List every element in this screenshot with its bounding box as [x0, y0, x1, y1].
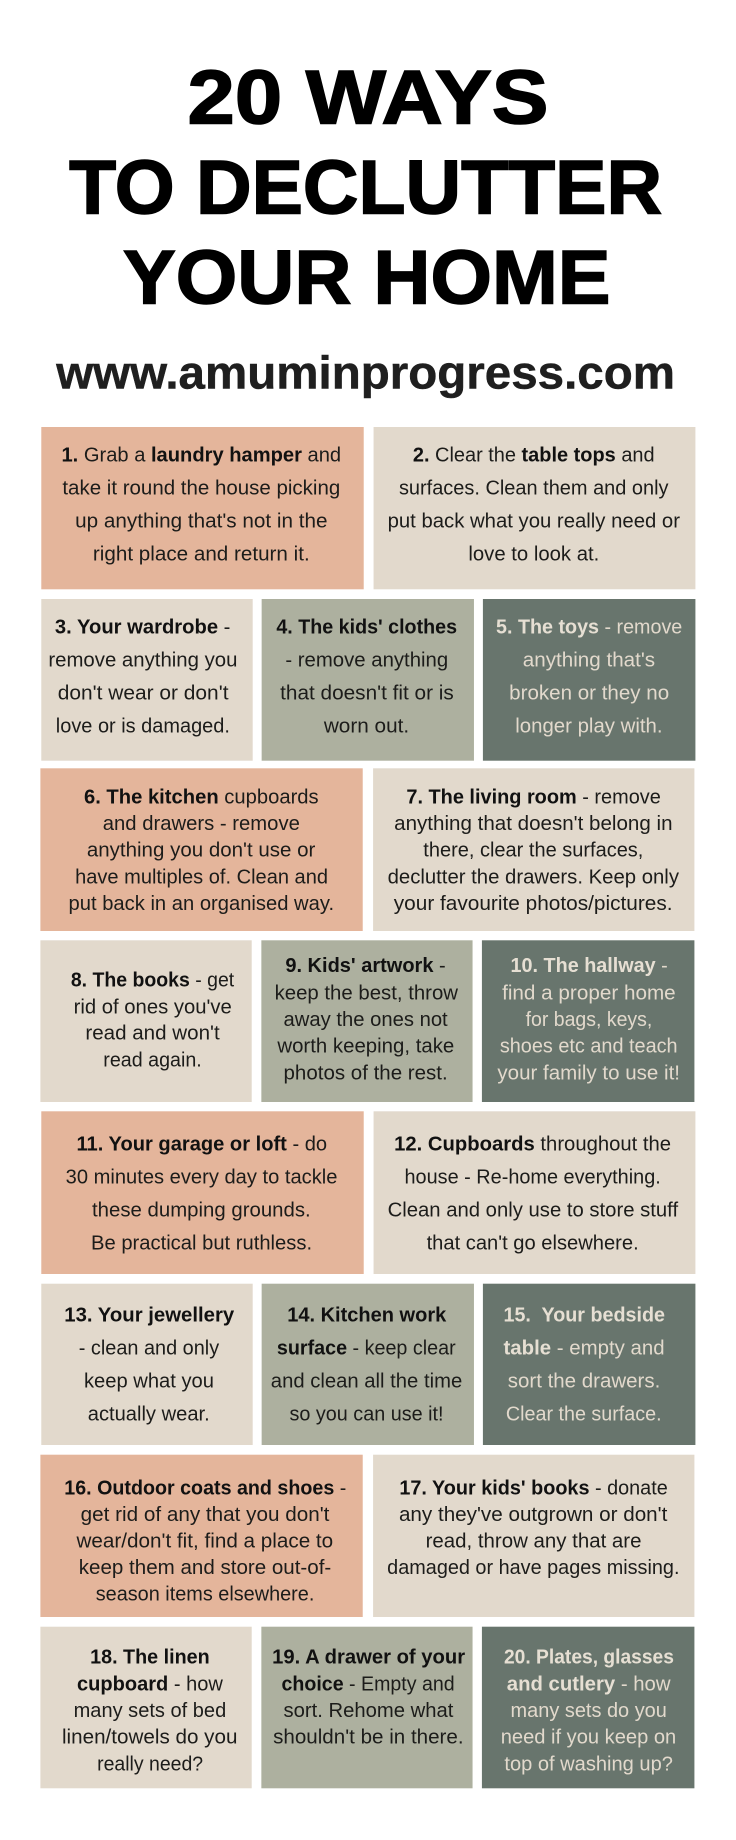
panel: tip 5: anything that's	[523, 649, 655, 672]
panel: tip 20: many sets do you	[511, 1699, 667, 1722]
panel: tip 14: surface - keep clear	[277, 1337, 456, 1360]
panel: tip 1: up anything that's not in the	[75, 510, 328, 533]
panel: tip 16: season items elsewhere.	[96, 1583, 314, 1606]
website url: www.amuminprogress.com	[55, 346, 675, 398]
title: YOUR HOME	[123, 236, 611, 321]
panel: tip 17: damaged or have pages missing.	[387, 1556, 679, 1579]
title: TO DECLUTTER	[69, 145, 662, 230]
panel: tip 5: longer play with.	[515, 715, 663, 738]
panel: tip 17: any they've outgrown or don't	[399, 1503, 668, 1526]
panel: tip 10: shoes etc and teach	[500, 1035, 678, 1058]
panel: tip 8: 8. The books - get	[71, 969, 234, 992]
panel: tip 7	[373, 768, 694, 931]
panel: tip 12: 12. Cupboards throughout the	[394, 1132, 671, 1155]
panel: tip 6: anything you don't use or	[87, 839, 316, 862]
panel: tip 8: rid of ones you've	[74, 995, 232, 1018]
panel: tip 12	[374, 1111, 695, 1274]
panel: tip 9: away the ones not	[284, 1008, 448, 1031]
panel: tip 13: 13. Your jewellery	[64, 1303, 235, 1326]
panel: tip 15: Clear the surface.	[506, 1403, 662, 1426]
panel: tip 15: 15. Your bedside	[504, 1303, 665, 1326]
panel: tip 8: read again.	[103, 1048, 202, 1071]
panel: tip 19: shouldn't be in there.	[273, 1726, 464, 1749]
panel: tip 14: and clean all the time	[271, 1370, 462, 1393]
panel: tip 18: cupboard - how	[77, 1672, 223, 1695]
panel: tip 20: 20. Plates, glasses	[504, 1646, 674, 1669]
panel: tip 12: Clean and only use to store stuff	[388, 1199, 678, 1222]
panel: tip 4	[262, 599, 474, 761]
panel: tip 11: these dumping grounds.	[92, 1199, 311, 1222]
panel: tip 16	[40, 1455, 363, 1617]
panel: tip 3: don't wear or don't	[58, 682, 229, 705]
panel: tip 16: keep them and store out-of-	[79, 1556, 331, 1579]
panel: tip 15: sort the drawers.	[508, 1370, 660, 1393]
panel: tip 18: really need?	[97, 1752, 203, 1775]
panel: tip 17	[373, 1455, 694, 1617]
panel: tip 4: that doesn't fit or is	[280, 682, 454, 705]
title	[69, 55, 662, 321]
panel: tip 5: broken or they no	[509, 682, 669, 705]
panel: tip 7: your favourite photos/pictures.	[394, 892, 673, 915]
panel: tip 6: and drawers - remove	[103, 812, 300, 835]
panel: tip 7: there, clear the surfaces,	[423, 839, 643, 862]
panel: tip 4: worn out.	[323, 715, 409, 738]
panel: tip 18	[40, 1627, 252, 1788]
panel: tip 2: surfaces. Clean them and only	[399, 476, 669, 499]
panel: tip 6: 6. The kitchen cupboards	[84, 785, 319, 808]
panel: tip 11	[41, 1111, 364, 1274]
panel: tip 20: top of washing up?	[504, 1752, 673, 1775]
panel: tip 9: photos of the rest.	[284, 1061, 448, 1084]
panel: tip 1: 1. Grab a laundry hamper and	[61, 443, 341, 466]
panel: tip 4: 4. The kids' clothes	[276, 615, 457, 638]
panel: tip 16: wear/don't fit, find a place to	[75, 1530, 333, 1553]
panel: tip 20	[482, 1627, 694, 1788]
panel: tip 18: linen/towels do you	[62, 1726, 237, 1749]
panel: tip 12: house - Re-home everything.	[405, 1166, 661, 1189]
panel: tip 11: Be practical but ruthless.	[91, 1232, 312, 1255]
panel: tip 8: read and won't	[85, 1022, 220, 1045]
panel: tip 19: sort. Rehome what	[284, 1699, 454, 1722]
panel: tip 10: your family to use it!	[497, 1061, 680, 1084]
panel: tip 11: 30 minutes every day to tackle	[66, 1166, 337, 1189]
panel: tip 13: actually wear.	[88, 1403, 210, 1426]
panel: tip 7: 7. The living room - remove	[406, 785, 661, 808]
panel: tip 9: worth keeping, take	[276, 1035, 454, 1058]
panel: tip 13	[41, 1284, 253, 1445]
panel: tip 3	[41, 599, 253, 761]
panel: tip 20: need if you keep on	[501, 1726, 676, 1749]
panel: tip 2: put back what you really need or	[388, 510, 680, 533]
panel: tip 17: 17. Your kids' books - donate	[399, 1476, 668, 1499]
panel: tip 15: table - empty and	[504, 1337, 665, 1360]
panel: tip 16: 16. Outdoor coats and shoes -	[64, 1476, 346, 1499]
panel: tip 3: remove anything you	[48, 649, 237, 672]
panel: tip 19: 19. A drawer of your	[272, 1646, 465, 1669]
panel: tip 11: 11. Your garage or loft - do	[77, 1132, 327, 1155]
panel: tip 12: that can't go elsewhere.	[427, 1232, 639, 1255]
panel: tip 3: love or is damaged.	[56, 715, 230, 738]
panel: tip 13: - clean and only	[79, 1337, 220, 1360]
panel: tip 5: 5. The toys - remove	[496, 615, 682, 638]
panel: tip 20: and cutlery - how	[507, 1672, 671, 1695]
panel: tip 3: 3. Your wardrobe -	[55, 615, 230, 638]
panel: tip 10: find a proper home	[502, 981, 676, 1004]
panel: tip 14: so you can use it!	[290, 1403, 444, 1426]
title: 20 WAYS	[188, 55, 548, 140]
panel: tip 7: declutter the drawers. Keep only	[388, 865, 680, 888]
panel: tip 9: keep the best, throw	[275, 981, 458, 1004]
panel: tip 9	[261, 940, 473, 1102]
panel: tip 1	[41, 427, 364, 589]
panel: tip 2	[374, 427, 695, 589]
panel: tip 5	[483, 599, 695, 761]
panel: tip 1: take it round the house picking	[62, 476, 340, 499]
panel: tip 19: choice - Empty and	[282, 1672, 455, 1695]
panel: tip 14	[262, 1284, 474, 1445]
panel: tip 6	[40, 768, 363, 931]
panel: tip 6: put back in an organised way.	[69, 892, 334, 915]
panel: tip 10: for bags, keys,	[526, 1008, 652, 1031]
panel: tip 18: many sets of bed	[74, 1699, 226, 1722]
panel: tip 9: 9. Kids' artwork -	[285, 954, 446, 977]
panel: tip 10: 10. The hallway -	[511, 954, 668, 977]
panel: tip 4: - remove anything	[285, 649, 448, 672]
panel: tip 15	[483, 1284, 695, 1445]
panel: tip 8	[40, 940, 252, 1102]
panel: tip 2: love to look at.	[468, 543, 599, 566]
panel: tip 18: 18. The linen	[90, 1646, 210, 1669]
panel: tip 13: keep what you	[84, 1370, 214, 1393]
panel: tip 14: 14. Kitchen work	[287, 1303, 447, 1326]
panel: tip 10	[482, 940, 694, 1102]
panel: tip 7: anything that doesn't belong in	[394, 812, 673, 835]
panel: tip 1: right place and return it.	[93, 543, 310, 566]
panel: tip 2: 2. Clear the table tops and	[413, 443, 655, 466]
panel: tip 6: have multiples of. Clean and	[75, 865, 328, 888]
panel: tip 19	[261, 1627, 473, 1788]
panel: tip 17: read, throw any that are	[426, 1530, 641, 1553]
panel: tip 16: get rid of any that you don't	[81, 1503, 330, 1526]
